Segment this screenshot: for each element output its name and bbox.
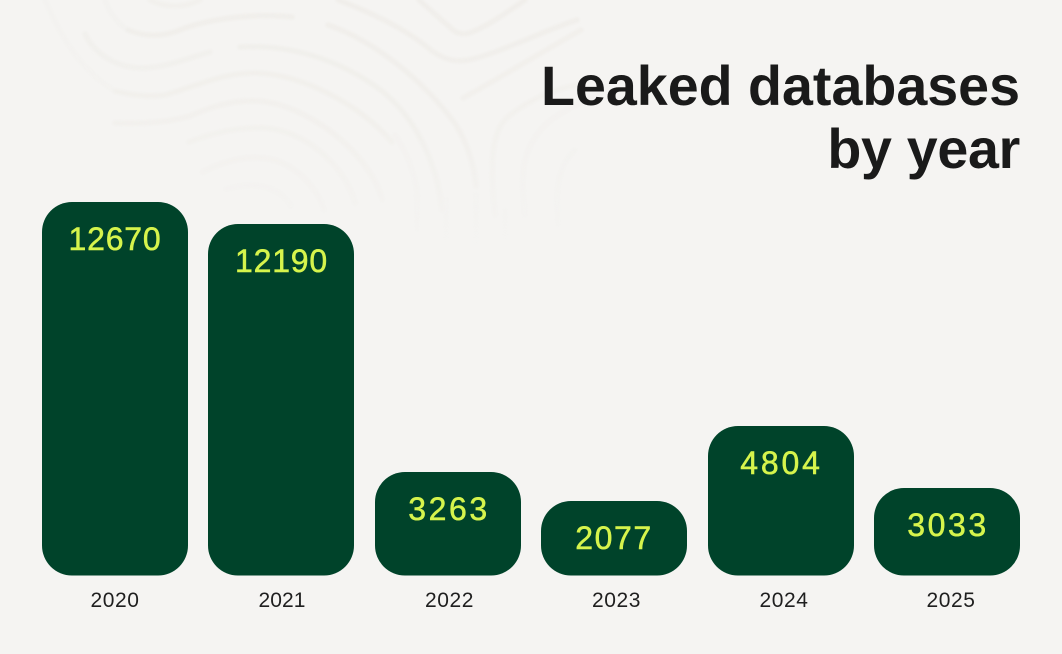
title second line: by year xyxy=(827,118,1020,180)
bar: 2023 xyxy=(541,501,687,612)
bar: 2023: 2077 xyxy=(575,520,653,556)
bar: 2024: 4804 xyxy=(740,445,823,481)
bar: 2022: 3263 xyxy=(408,491,490,527)
bar: 2021: 12190 xyxy=(235,243,328,279)
bar: 2024 xyxy=(708,426,854,612)
bar: 2024: 2024 xyxy=(759,589,809,612)
bar: 2025 xyxy=(874,488,1020,612)
bar: 2021: 2021 xyxy=(258,589,306,612)
bar: 2020: 12670 xyxy=(69,221,161,257)
bar: 2025: 3033 xyxy=(907,507,989,543)
bar: 2022 xyxy=(375,472,521,612)
fingerprint background pattern xyxy=(45,0,600,245)
bar: 2022: 2022 xyxy=(425,589,474,612)
bar: 2025: 2025 xyxy=(926,589,976,612)
title: Leaked databases xyxy=(541,55,1020,117)
bar: 2023: 2023 xyxy=(592,589,641,612)
bar: 2021 xyxy=(208,224,354,612)
bar: 2020 xyxy=(42,202,188,612)
bar: 2020: 2020 xyxy=(90,589,140,612)
